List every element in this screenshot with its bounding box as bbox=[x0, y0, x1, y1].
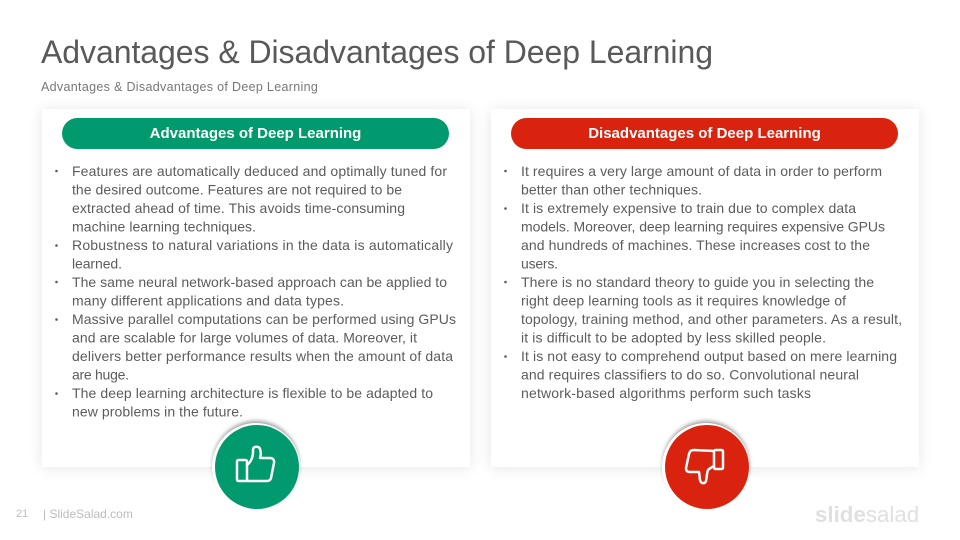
title: Advantages & Disadvantages of Deep Learning bbox=[41, 34, 713, 70]
text block: disadvantages list: network-based algorithms perform such tasks bbox=[521, 385, 811, 401]
text block: disadvantages list: and hundreds of machines. These increases cost to the bbox=[521, 237, 870, 253]
text block: advantages list: Massive parallel computations can be performed using GPUs bbox=[72, 311, 456, 327]
text block: disadvantages list: It is extremely expensive to train due to complex data bbox=[521, 200, 856, 216]
heading: advantages: Advantages of Deep Learning bbox=[150, 125, 361, 142]
heading: advantages bbox=[62, 118, 449, 149]
panel: disadvantages card bbox=[491, 109, 919, 467]
text block: advantages list: the desired outcome. Features are not required to be bbox=[72, 182, 402, 198]
text block: disadvantages list: It requires a very large amount of data in order to perform bbox=[521, 163, 882, 179]
logo: slidesalad: slidesalad bbox=[815, 502, 919, 527]
text block: advantages list: The same neural network-based approach can be applied to bbox=[72, 274, 447, 290]
text block: advantages list: Robustness to natural variations in the data is automatically bbox=[72, 237, 453, 253]
text block: disadvantages list: better than other techniques. bbox=[521, 182, 702, 198]
text block: advantages list: and are scalable for large volumes of data. Moreover, it bbox=[72, 330, 417, 346]
icon: thumbs up bbox=[212, 423, 300, 511]
panel: advantages card bbox=[42, 109, 470, 467]
text block: advantages list: many different applications and data types. bbox=[72, 292, 344, 308]
text block: disadvantages list: it is difficult to be adopted by less skilled people. bbox=[521, 330, 826, 346]
text block: disadvantages list: right deep learning tools as it requires knowledge of bbox=[521, 292, 846, 308]
text block: disadvantages list: models. Moreover, deep learning requires expensive GPUs bbox=[521, 218, 885, 234]
text block: disadvantages list: It is not easy to comprehend output based on mere learning bbox=[521, 348, 897, 364]
text block: disadvantages list: topology, training method, and other parameters. As a result, bbox=[521, 311, 902, 327]
footer label: | SlideSalad.com bbox=[43, 507, 133, 521]
text block: advantages list: delivers better performance results when the amount of data bbox=[72, 348, 453, 364]
heading: disadvantages: Disadvantages of Deep Learning bbox=[588, 125, 821, 142]
text block: advantages list: Features are automatically deduced and optimally tuned for bbox=[72, 163, 447, 179]
text block: advantages list: machine learning techniques. bbox=[72, 218, 256, 234]
text block: advantages list: The deep learning architecture is flexible to be adapted to bbox=[72, 385, 433, 401]
icon: thumbs down bbox=[662, 423, 750, 511]
text block: advantages list: extracted ahead of time. This avoids time-consuming bbox=[72, 200, 405, 216]
text block: advantages list: new problems in the future. bbox=[72, 404, 243, 420]
text block: disadvantages list: There is no standard theory to guide you in selecting the bbox=[521, 274, 874, 290]
text block: disadvantages list: users. bbox=[521, 256, 558, 272]
text block: disadvantages list: and requires classifiers to do so. Convolutional neural bbox=[521, 366, 859, 382]
page number: 21 bbox=[16, 508, 28, 520]
heading: disadvantages bbox=[511, 118, 898, 149]
subtitle: Advantages & Disadvantages of Deep Learning bbox=[41, 80, 318, 94]
text block: advantages list: learned. bbox=[72, 256, 122, 272]
text block: advantages list: are huge. bbox=[72, 366, 129, 382]
